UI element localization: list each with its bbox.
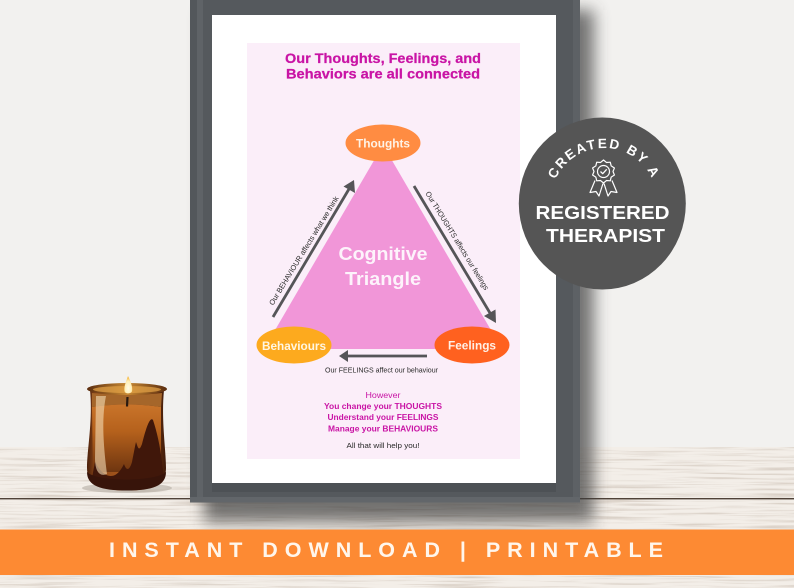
arrow: feelings to behaviours xyxy=(339,350,427,362)
candle xyxy=(82,376,172,493)
node: Thoughts: Thoughts xyxy=(356,138,410,150)
badge: registered therapist: CREATED BY A xyxy=(548,138,658,178)
poster panel xyxy=(247,43,520,459)
wick xyxy=(126,397,129,406)
flame xyxy=(124,376,132,393)
closing message: All that will help you! xyxy=(346,441,420,450)
node: Feelings: Feelings xyxy=(448,340,496,352)
curved text xyxy=(551,148,657,201)
wooden table xyxy=(0,447,794,588)
label: thoughts affects: Our THOUGHTS affects our feelings xyxy=(424,190,491,292)
orange banner xyxy=(0,530,794,575)
closing message: Manage your BEHAVIOURS xyxy=(328,424,438,434)
picture frame xyxy=(190,0,580,502)
bottom of glass xyxy=(87,472,166,490)
closing message: You change your THOUGHTS xyxy=(324,401,442,411)
badge: registered therapist xyxy=(518,118,686,290)
badge: registered therapist: REGISTERED xyxy=(536,203,670,223)
cognitive triangle: Cognitive xyxy=(338,243,428,264)
glass body xyxy=(87,390,166,490)
white mat xyxy=(212,15,556,483)
frame shadow xyxy=(204,10,594,522)
node: Behaviours: Behaviours xyxy=(262,341,326,353)
wax xyxy=(92,404,161,472)
closing message: However xyxy=(366,390,401,400)
wall background xyxy=(0,0,794,448)
cognitive triangle: Triangle xyxy=(345,268,421,289)
poster title: Behaviors are all connected xyxy=(286,66,480,82)
label: feelings affect: Our FEELINGS affect our behaviour xyxy=(325,366,438,374)
label: behaviour affects: Our BEHAVIOUR affects what we think xyxy=(267,194,341,307)
badge: registered therapist: THERAPIST xyxy=(546,226,665,246)
closing message xyxy=(324,390,442,450)
orange banner: INSTANT DOWNLOAD | PRINTABLE xyxy=(109,538,663,562)
node: Feelings xyxy=(434,326,510,364)
rim xyxy=(87,383,167,395)
icon: award rosette xyxy=(590,160,617,196)
poster title: Our Thoughts, Feelings, and xyxy=(285,50,481,66)
closing message: Understand your FEELINGS xyxy=(328,412,439,422)
dark drips xyxy=(92,419,164,484)
node: Behaviours xyxy=(256,326,332,364)
arrow: thoughts to feelings xyxy=(414,186,496,323)
glass highlight xyxy=(95,396,107,475)
arrow: behaviours to thoughts xyxy=(273,180,355,317)
node: Thoughts xyxy=(346,124,420,162)
poster title xyxy=(285,50,481,82)
cognitive triangle xyxy=(264,145,502,349)
upper glow xyxy=(92,393,162,407)
